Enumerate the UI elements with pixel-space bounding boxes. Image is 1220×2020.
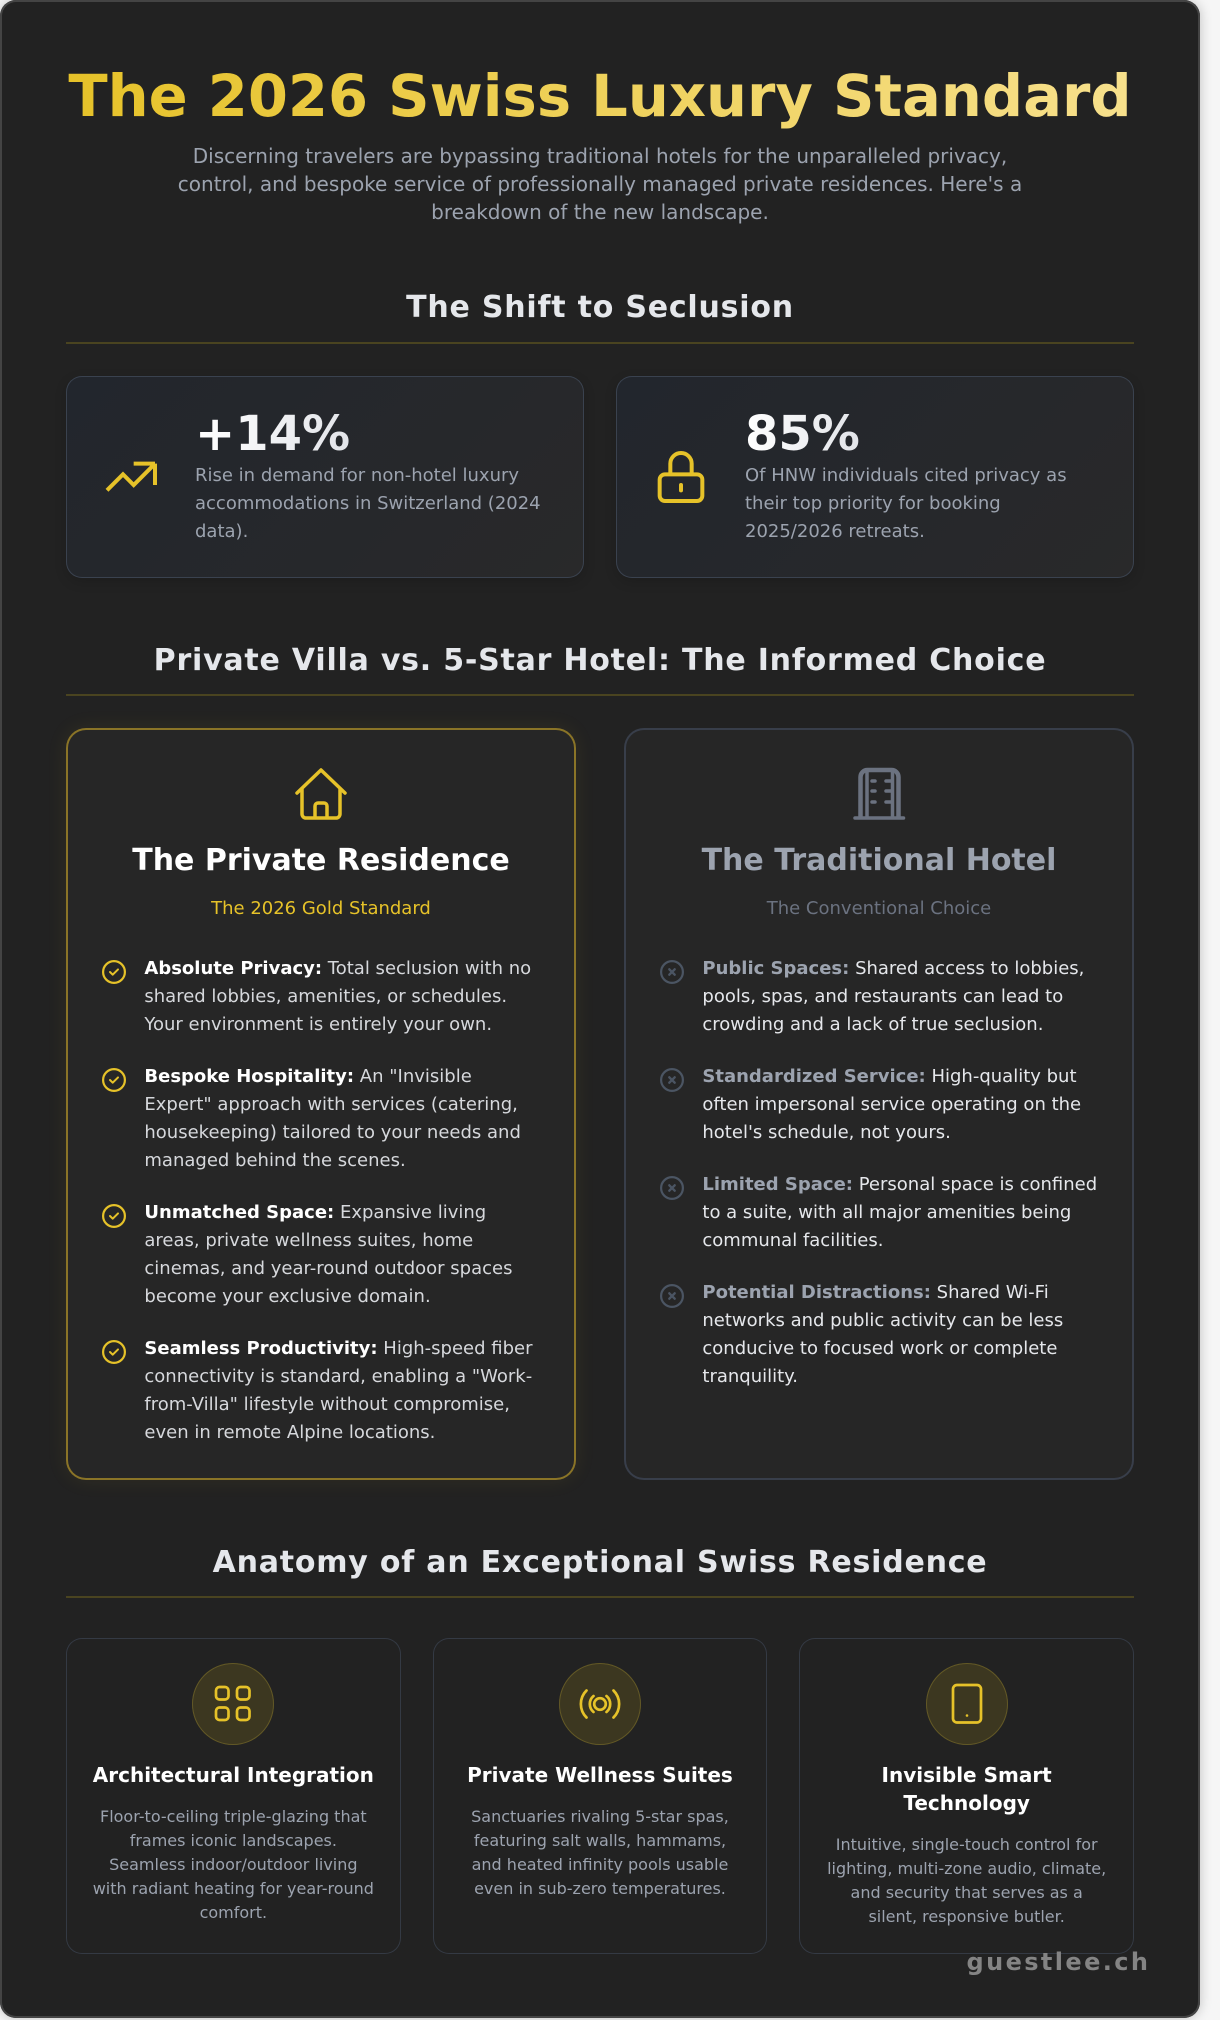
feature title: Invisible Smart: [882, 1763, 1052, 1787]
feature title: [882, 1763, 1052, 1815]
panel: invisible smart technology: [799, 1638, 1134, 1954]
item text: crowding and a lack of true seclusion.: [702, 1014, 1043, 1035]
item text: from-Villa" lifestyle without compromise,: [144, 1394, 510, 1415]
stat description: data).: [195, 520, 248, 542]
item text: Public Spaces: Shared access to lobbies,: [702, 958, 1084, 979]
item text: Limited Space: Personal space is confined: [702, 1174, 1097, 1195]
item text: networks and public activity can be less: [702, 1310, 1063, 1331]
panel: stat 85 percent: [616, 376, 1134, 578]
stat description: 2025/2026 retreats.: [745, 520, 925, 542]
item text: conducive to focused work or complete: [702, 1338, 1057, 1359]
list item: unmatched space: [102, 1202, 512, 1307]
feature description: [471, 1807, 729, 1898]
feature description: Intuitive, single-touch control for: [836, 1835, 1098, 1854]
item text: tranquility.: [702, 1366, 798, 1387]
stat description: [745, 464, 1067, 542]
stat number: +14%: [195, 406, 350, 462]
feature description: Seamless indoor/outdoor living: [109, 1855, 358, 1874]
title: The 2026 Swiss Luxury Standard: [68, 63, 1132, 130]
stat description: accommodations in Switzerland (2024: [195, 492, 541, 514]
item text: [702, 1282, 1063, 1387]
item text: Absolute Privacy: Total seclusion with no: [144, 958, 531, 979]
intro text: breakdown of the new landscape.: [431, 200, 769, 224]
item text: become your exclusive domain.: [144, 1286, 431, 1307]
feature description: and heated infinity pools usable: [472, 1855, 728, 1874]
item text: Your environment is entirely your own.: [144, 1014, 492, 1035]
item text: communal facilities.: [702, 1230, 883, 1251]
panel: stat 14 percent: [66, 376, 584, 578]
item text: [702, 958, 1084, 1035]
list item: standardized service: [660, 1066, 1081, 1143]
icon: check: [102, 1340, 126, 1364]
card title: The Traditional Hotel: [702, 843, 1056, 878]
item text: cinemas, and year-round outdoor spaces: [144, 1258, 512, 1279]
item text: Bespoke Hospitality: An "Invisible: [144, 1066, 472, 1087]
icon: broadcast rings in circle: [559, 1663, 641, 1745]
item text: Unmatched Space: Expansive living: [144, 1202, 486, 1223]
item text: [702, 1066, 1081, 1143]
item text: hotel's schedule, not yours.: [702, 1122, 951, 1143]
panel: the traditional hotel: [624, 728, 1134, 1480]
feature description: silent, responsive butler.: [868, 1907, 1065, 1926]
item text: to a suite, with all major amenities being: [702, 1202, 1071, 1223]
card subtitle: The Conventional Choice: [767, 898, 991, 918]
feature title: Architectural Integration: [93, 1763, 374, 1787]
list item: seamless productivity: [102, 1338, 532, 1443]
icon: trending up arrow: [106, 462, 157, 492]
list item: potential distractions: [660, 1282, 1063, 1387]
item text: managed behind the scenes.: [144, 1150, 406, 1171]
item text: [144, 1338, 532, 1443]
item text: shared lobbies, amenities, or schedules.: [144, 986, 507, 1007]
intro text: control, and bespoke service of professionally managed private residences. Here's a: [178, 172, 1022, 196]
item text: [702, 1174, 1097, 1251]
item text: housekeeping) tailored to your needs and: [144, 1122, 521, 1143]
feature description: [827, 1835, 1106, 1926]
list item: limited space: [660, 1174, 1097, 1251]
item text: Potential Distractions: Shared Wi-Fi: [702, 1282, 1049, 1303]
item text: connectivity is standard, enabling a "Work-: [144, 1366, 532, 1387]
stat description: Of HNW individuals cited privacy as: [745, 464, 1067, 486]
icon: grid in circle: [192, 1663, 274, 1745]
item text: areas, private wellness suites, home: [144, 1230, 473, 1251]
icon: tablet in circle: [926, 1663, 1008, 1745]
stat number: 85%: [745, 406, 860, 462]
icon: check: [102, 960, 126, 984]
feature title: Technology: [903, 1791, 1030, 1815]
stat description: Rise in demand for non-hotel luxury: [195, 464, 519, 486]
watermark: guestlee.ch: [966, 1948, 1150, 1976]
icon: padlock: [658, 451, 704, 503]
heading: anatomy of a residence: Anatomy of an Exceptional Swiss Residence: [213, 1545, 987, 1580]
feature description: with radiant heating for year-round: [93, 1879, 374, 1898]
icon: check: [102, 1068, 126, 1092]
feature description: lighting, multi-zone audio, climate,: [827, 1859, 1106, 1878]
item text: Expert" approach with services (catering,: [144, 1094, 518, 1115]
card subtitle: The 2026 Gold Standard: [211, 898, 431, 918]
feature description: Floor-to-ceiling triple-glazing that: [100, 1807, 367, 1826]
heading: villa vs hotel: Private Villa vs. 5-Star Hotel: The Informed Choice: [154, 643, 1046, 678]
panel: the private residence: [66, 728, 576, 1480]
icon: hotel building: [853, 768, 906, 820]
list item: bespoke hospitality: [102, 1066, 521, 1171]
item text: Standardized Service: High-quality but: [702, 1066, 1077, 1087]
icon: cross: [660, 1176, 684, 1200]
item text: Seamless Productivity: High-speed fiber: [144, 1338, 532, 1359]
item text: pools, spas, and restaurants can lead to: [702, 986, 1063, 1007]
feature description: comfort.: [200, 1903, 267, 1922]
card title: The Private Residence: [132, 843, 510, 878]
feature description: [93, 1807, 374, 1922]
feature description: Sanctuaries rivaling 5-star spas,: [471, 1807, 729, 1826]
feature title: Private Wellness Suites: [467, 1763, 733, 1787]
feature description: even in sub-zero temperatures.: [474, 1879, 726, 1898]
icon: cross: [660, 960, 684, 984]
stat description: their top priority for booking: [745, 492, 1001, 514]
item text: [144, 1066, 521, 1171]
icon: check: [102, 1204, 126, 1228]
panel: architectural integration: [66, 1638, 401, 1954]
icon: cross: [660, 1284, 684, 1308]
icon: cross: [660, 1068, 684, 1092]
intro text: [178, 144, 1022, 224]
feature description: featuring salt walls, hammams,: [474, 1831, 726, 1850]
item text: even in remote Alpine locations.: [144, 1422, 435, 1443]
list item: absolute privacy: [102, 958, 531, 1035]
heading: the shift to seclusion: The Shift to Seclusion: [406, 290, 794, 325]
panel: private wellness suites: [433, 1638, 767, 1954]
item text: often impersonal service operating on the: [702, 1094, 1081, 1115]
list item: public spaces: [660, 958, 1084, 1035]
feature description: and security that serves as a: [851, 1883, 1083, 1902]
item text: [144, 958, 531, 1035]
stat description: [195, 464, 541, 542]
icon: house: [295, 768, 347, 820]
item text: [144, 1202, 512, 1307]
intro text: Discerning travelers are bypassing traditional hotels for the unparalleled privacy,: [193, 144, 1007, 168]
feature description: frames iconic landscapes.: [130, 1831, 337, 1850]
